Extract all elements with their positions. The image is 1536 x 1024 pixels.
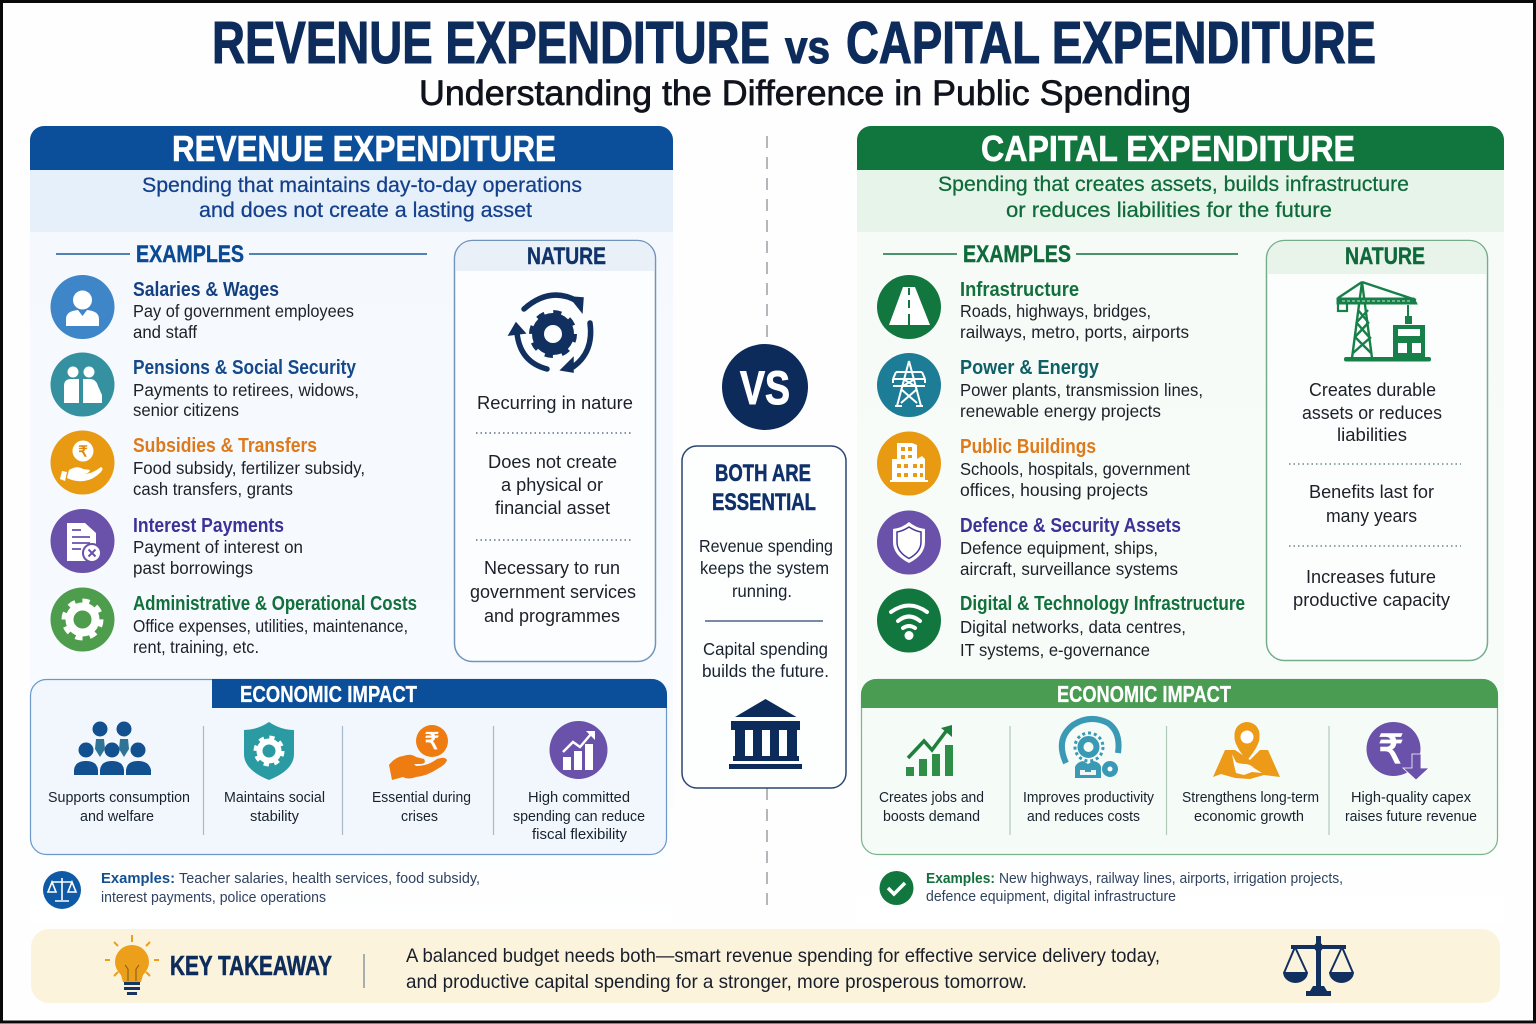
panel: revenue expenditure bbox=[30, 126, 673, 922]
impact: flexibility: spending can reduce bbox=[513, 809, 645, 825]
icon: shield gear bbox=[244, 722, 294, 780]
example: infrastructure bbox=[877, 275, 1189, 342]
capital nature box: Increases future bbox=[1306, 566, 1436, 587]
impact: jobs: boosts demand bbox=[883, 809, 980, 825]
capital economic impact bbox=[861, 679, 1498, 854]
example: pensions: Payments to retirees, widows, bbox=[133, 380, 359, 400]
impact: productivity bbox=[1023, 719, 1155, 825]
example: administrative bbox=[50, 588, 417, 657]
capital nature box: assets or reduces bbox=[1302, 402, 1442, 423]
key takeaway band: and productive capital spending for a stronger, more prosperous tomorrow. bbox=[406, 971, 1027, 993]
title: CAPITAL EXPENDITURE bbox=[846, 10, 1376, 76]
capital nature box: NATURE bbox=[1345, 243, 1425, 270]
capital definition: Spending that creates assets, builds infrastructure bbox=[938, 173, 1409, 196]
example: salaries: Salaries & Wages bbox=[133, 279, 279, 301]
subtitle: Understanding the Difference in Public Spending bbox=[419, 74, 1191, 113]
example: subsidies: cash transfers, grants bbox=[133, 479, 293, 499]
impact: jobs: Creates jobs and bbox=[879, 790, 984, 806]
capital nature box bbox=[1266, 240, 1488, 660]
example: buildings: Public Buildings bbox=[960, 436, 1096, 458]
example: digital: Digital networks, data centres, bbox=[960, 617, 1186, 637]
icon: government building bbox=[729, 699, 802, 769]
icon: map pin bbox=[1213, 722, 1280, 779]
title: vs bbox=[785, 21, 830, 73]
revenue nature box: a physical or bbox=[501, 474, 603, 495]
title: REVENUE EXPENDITURE bbox=[212, 10, 770, 76]
icon: hand with rupee bbox=[50, 430, 114, 494]
impact: crises: Essential during bbox=[372, 790, 471, 806]
impact: crises bbox=[372, 725, 471, 825]
icon: transmission tower bbox=[877, 353, 941, 417]
example: defence: Defence equipment, ships, bbox=[960, 538, 1158, 558]
capital examples heading: EXAMPLES bbox=[963, 241, 1071, 268]
capital definition: or reduces liabilities for the future bbox=[1006, 199, 1332, 222]
example: salaries bbox=[50, 275, 354, 342]
icon: light bulb bbox=[105, 935, 159, 995]
icon: building bbox=[877, 432, 941, 496]
example: digital bbox=[877, 588, 1245, 660]
icon: wifi bbox=[877, 588, 941, 652]
icon: growth circle bbox=[550, 721, 608, 779]
revenue panel header bbox=[30, 126, 673, 170]
example: interest bbox=[50, 509, 303, 578]
example: defence: Defence & Security Assets bbox=[960, 515, 1181, 537]
example: subsidies bbox=[50, 430, 365, 499]
example: salaries: Pay of government employees bbox=[133, 301, 354, 321]
title bbox=[212, 10, 1376, 76]
center divider bbox=[766, 136, 768, 905]
revenue definition bbox=[30, 170, 673, 232]
panel: capital expenditure bbox=[857, 126, 1504, 922]
revenue examples note: Examples: bbox=[101, 870, 175, 887]
icon: crane and building bbox=[1337, 282, 1431, 362]
revenue examples note: Teacher salaries, health services, food subsidy, bbox=[179, 871, 480, 887]
icon: road bbox=[877, 275, 941, 339]
impact: stability: Maintains social bbox=[224, 790, 325, 806]
both are essential card: BOTH ARE bbox=[715, 460, 811, 487]
revenue nature box: government services bbox=[470, 581, 636, 602]
impact: productivity: Improves productivity bbox=[1023, 790, 1155, 806]
both are essential card: builds the future. bbox=[702, 661, 829, 681]
revenue nature box: Does not create bbox=[488, 451, 617, 472]
example: infrastructure: Infrastructure bbox=[960, 279, 1079, 301]
example: power bbox=[877, 353, 1203, 421]
example: pensions: senior citizens bbox=[133, 400, 239, 420]
icon: hand with rupee: ₹ bbox=[78, 444, 88, 460]
impact: consumption: Supports consumption bbox=[48, 790, 190, 806]
vs badge bbox=[722, 344, 808, 430]
example: power: Power & Energy bbox=[960, 357, 1100, 379]
impact: growth: Strengthens long-term bbox=[1182, 790, 1319, 806]
example: digital: IT systems, e-governance bbox=[960, 640, 1150, 660]
icon: gear person bbox=[1062, 719, 1119, 778]
example: subsidies: Food subsidy, fertilizer subsidy, bbox=[133, 458, 365, 478]
economic impact header: ECONOMIC IMPACT bbox=[1057, 681, 1231, 707]
revenue economic impact bbox=[30, 679, 667, 854]
example: power: renewable energy projects bbox=[960, 401, 1161, 421]
icon: document bbox=[50, 509, 114, 573]
revenue definition: and does not create a lasting asset bbox=[199, 199, 532, 222]
capital nature box: liabilities bbox=[1337, 424, 1407, 445]
example: buildings: offices, housing projects bbox=[960, 480, 1148, 500]
example: buildings bbox=[877, 432, 1190, 500]
capital nature box: productive capacity bbox=[1293, 589, 1451, 610]
example: administrative: Office expenses, utilities, maintenance, bbox=[133, 616, 408, 636]
impact: jobs bbox=[879, 725, 984, 825]
capital panel header bbox=[857, 126, 1504, 170]
vs badge: VS bbox=[740, 361, 790, 414]
both are essential card: Capital spending bbox=[703, 639, 828, 659]
both are essential card bbox=[682, 446, 846, 788]
icon: gear bbox=[50, 588, 114, 652]
impact: consumption bbox=[48, 722, 190, 825]
icon: people bbox=[74, 722, 151, 775]
impact: revenue: High-quality capex bbox=[1351, 790, 1472, 806]
capital definition bbox=[857, 170, 1504, 232]
revenue nature box: NATURE bbox=[527, 243, 606, 270]
capital nature box: many years bbox=[1326, 505, 1417, 526]
capital nature box: Benefits last for bbox=[1309, 481, 1434, 502]
economic impact header bbox=[861, 679, 1498, 708]
revenue examples note: interest payments, police operations bbox=[101, 890, 326, 906]
icon: shield bbox=[877, 510, 941, 574]
economic impact header: ECONOMIC IMPACT bbox=[240, 681, 417, 707]
capital examples note: defence equipment, digital infrastructure bbox=[926, 889, 1176, 905]
revenue nature box: financial asset bbox=[495, 497, 610, 518]
impact: flexibility: High committed bbox=[528, 790, 630, 806]
example: interest: past borrowings bbox=[133, 558, 253, 578]
revenue nature box: and programmes bbox=[484, 605, 620, 626]
example: power: Power plants, transmission lines, bbox=[960, 380, 1203, 400]
revenue nature box bbox=[454, 240, 656, 662]
icon: recurring gear bbox=[509, 295, 591, 372]
impact: revenue bbox=[1345, 722, 1477, 825]
both are essential card: running. bbox=[732, 581, 792, 601]
impact: flexibility bbox=[513, 721, 645, 843]
key takeaway band: KEY TAKEAWAY bbox=[170, 950, 332, 981]
impact: stability: stability bbox=[250, 809, 300, 825]
icon: orange hand and rupee: ₹ bbox=[425, 728, 440, 754]
example: infrastructure: railways, metro, ports, airports bbox=[960, 322, 1189, 342]
impact: flexibility: fiscal flexibility bbox=[532, 827, 628, 843]
example: infrastructure: Roads, highways, bridges, bbox=[960, 301, 1151, 321]
both are essential card: Revenue spending bbox=[699, 536, 833, 556]
impact: consumption: and welfare bbox=[80, 809, 154, 825]
example: interest: Payment of interest on bbox=[133, 537, 303, 557]
capital examples note: Examples: bbox=[926, 870, 995, 887]
capital examples note bbox=[880, 870, 1343, 905]
revenue panel header: REVENUE EXPENDITURE bbox=[172, 128, 556, 169]
impact: crises: crises bbox=[401, 809, 438, 825]
both are essential card: ESSENTIAL bbox=[712, 489, 816, 516]
example: salaries: and staff bbox=[133, 322, 197, 342]
icon: retirees bbox=[50, 352, 114, 416]
impact: growth: economic growth bbox=[1194, 809, 1304, 825]
icon: check badge bbox=[880, 871, 914, 905]
example: administrative: rent, training, etc. bbox=[133, 637, 259, 657]
icon: employee bbox=[50, 275, 114, 339]
revenue nature box: Recurring in nature bbox=[477, 392, 633, 413]
icon: rising chart bbox=[906, 725, 953, 776]
example: defence: aircraft, surveillance systems bbox=[960, 559, 1178, 579]
capital examples note: New highways, railway lines, airports, irrigation projects, bbox=[999, 871, 1343, 887]
key takeaway band: A balanced budget needs both—smart revenue spending for effective service delivery today, bbox=[406, 945, 1160, 967]
both are essential card: keeps the system bbox=[700, 558, 829, 578]
revenue examples heading: EXAMPLES bbox=[136, 241, 244, 268]
key takeaway band bbox=[31, 929, 1500, 1003]
impact: productivity: and reduces costs bbox=[1027, 809, 1140, 825]
impact: growth bbox=[1182, 722, 1319, 825]
impact: stability bbox=[224, 722, 325, 825]
example: buildings: Schools, hospitals, government bbox=[960, 459, 1190, 479]
revenue definition: Spending that maintains day-to-day operations bbox=[142, 174, 582, 197]
revenue nature box: Necessary to run bbox=[484, 557, 620, 578]
icon: rupee with arrow: ₹ bbox=[1378, 728, 1404, 772]
example: pensions: Pensions & Social Security bbox=[133, 357, 357, 379]
example: interest: Interest Payments bbox=[133, 515, 284, 537]
example: subsidies: Subsidies & Transfers bbox=[133, 435, 317, 457]
economic impact header bbox=[212, 679, 667, 708]
example: defence bbox=[877, 510, 1181, 579]
icon: balance scales bbox=[1283, 936, 1354, 996]
capital panel header: CAPITAL EXPENDITURE bbox=[981, 128, 1355, 169]
example: digital: Digital & Technology Infrastructure bbox=[960, 593, 1245, 615]
example: administrative: Administrative & Operational Costs bbox=[133, 593, 417, 615]
icon: scales badge bbox=[43, 871, 81, 909]
example: pensions bbox=[50, 352, 359, 420]
capital nature box: Creates durable bbox=[1309, 379, 1436, 400]
impact: revenue: raises future revenue bbox=[1345, 809, 1477, 825]
revenue examples note bbox=[43, 870, 480, 909]
